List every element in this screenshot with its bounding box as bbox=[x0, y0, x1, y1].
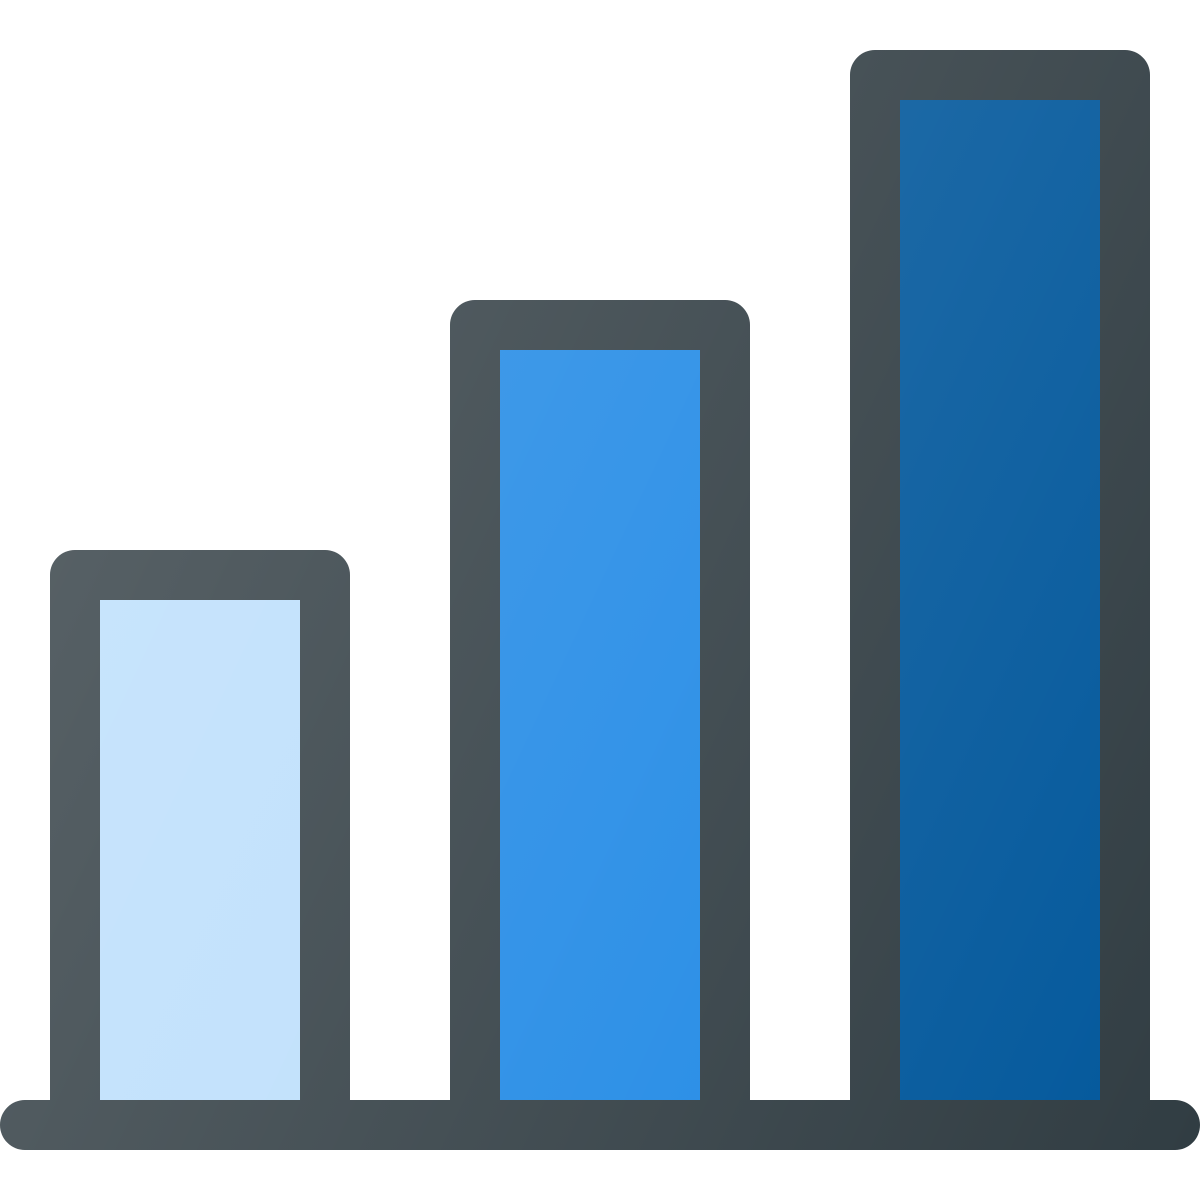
bar: short light blue bbox=[100, 600, 300, 1100]
bar: medium blue bbox=[500, 350, 700, 1100]
bar: tall dark blue bbox=[900, 100, 1100, 1100]
